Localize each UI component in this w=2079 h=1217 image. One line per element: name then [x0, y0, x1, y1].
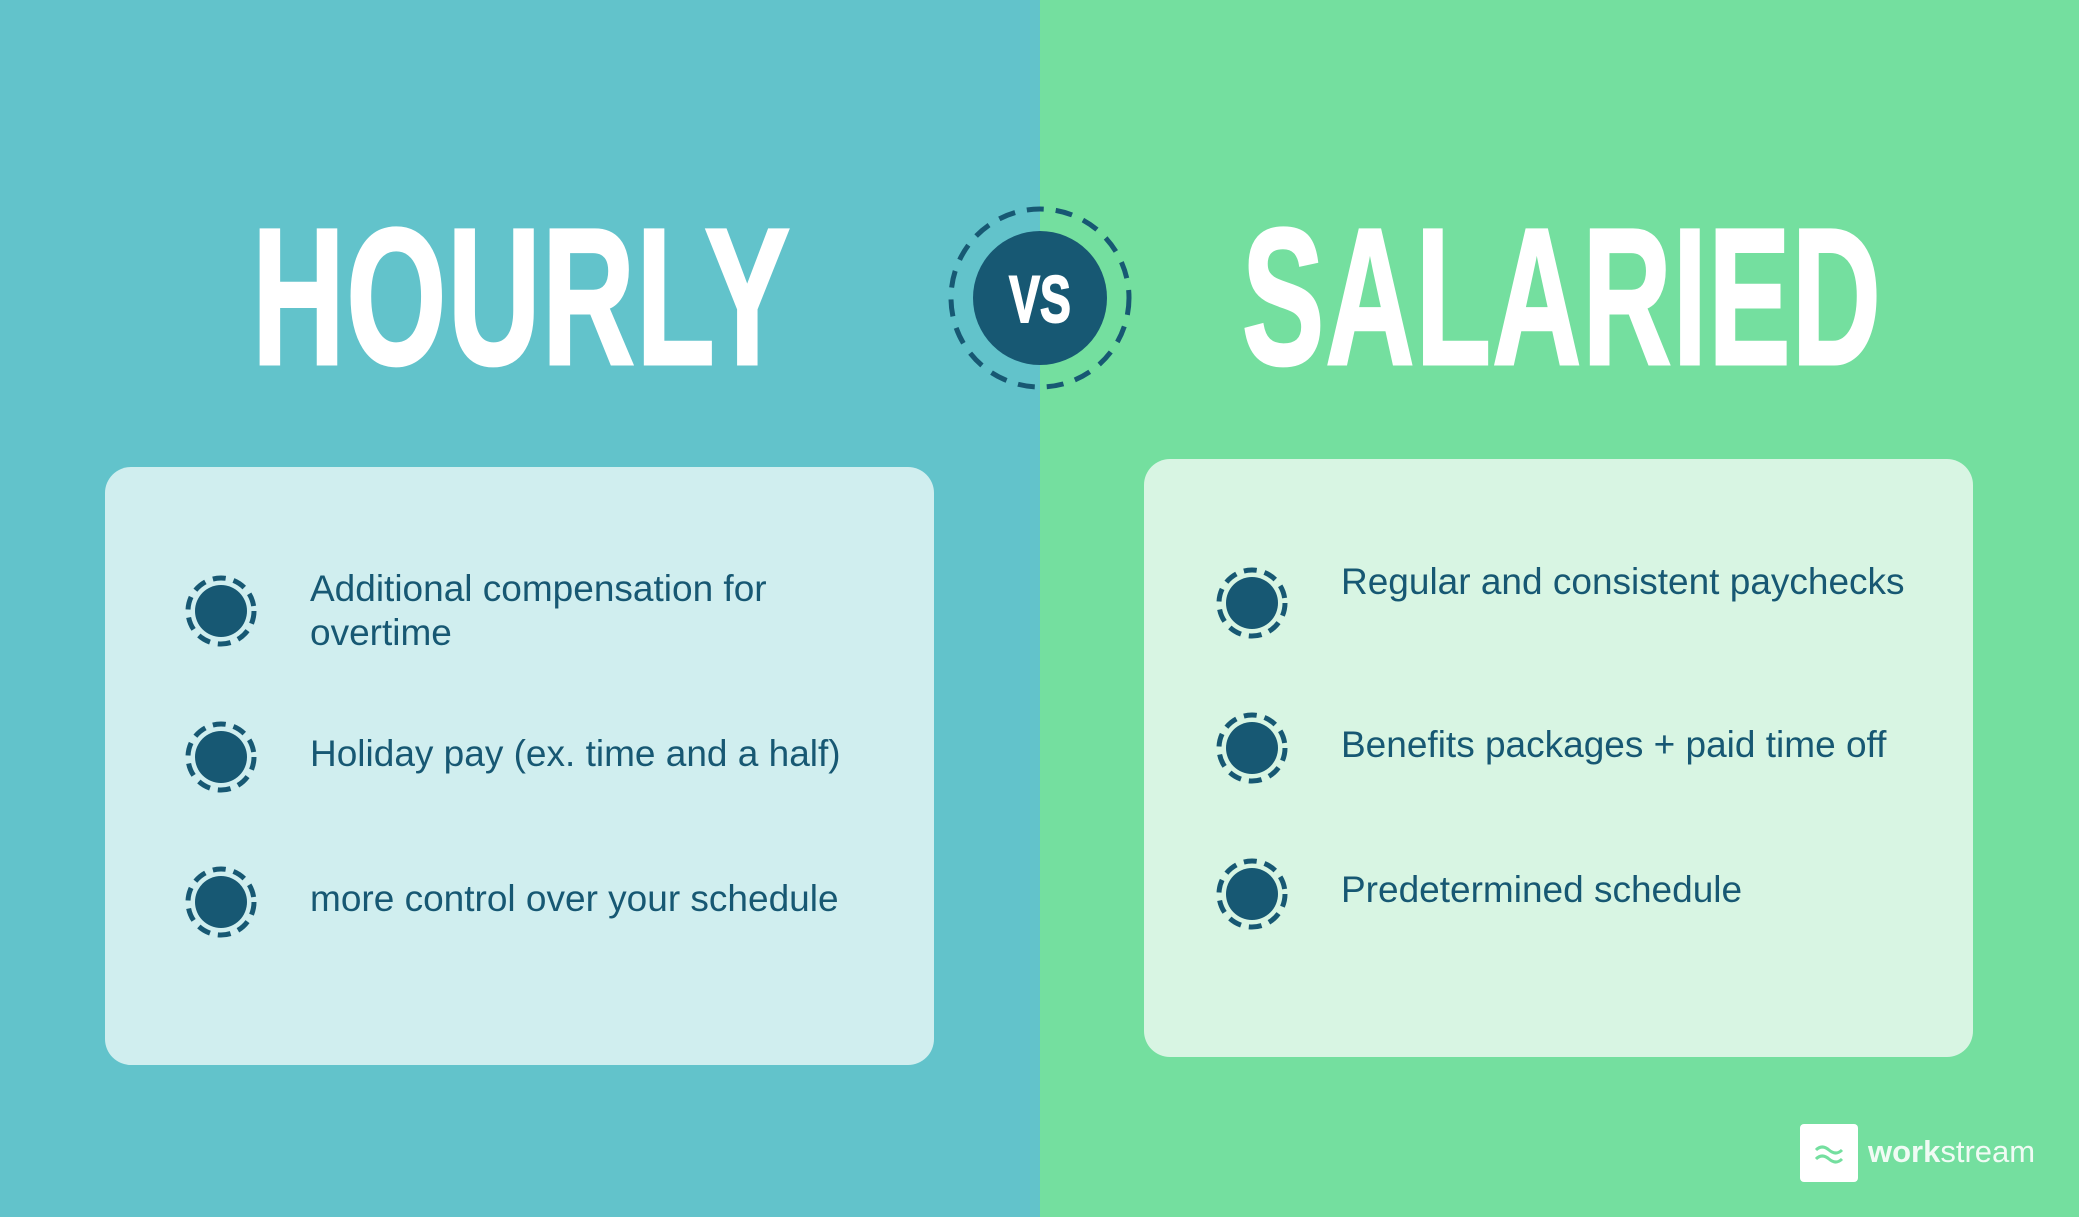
icon: VS badge: VS: [1009, 263, 1071, 337]
text: item 2: Benefits packages + paid time off: [1341, 724, 1886, 765]
title: SALARIED: SALARIED: [1242, 188, 1882, 406]
icon: bullet 1: [1216, 568, 1288, 638]
panel: hourly list box: [105, 467, 934, 1065]
text: item 1: overtime: [310, 612, 452, 653]
panel: salaried list box: [1144, 459, 1973, 1057]
logo: workstream: [1800, 1124, 2035, 1182]
icon: bullet 2: [1216, 712, 1288, 784]
icon: logo mark: [1800, 1124, 1858, 1182]
text: item 2: Holiday pay (ex. time and a half): [310, 733, 841, 774]
panel: hourly background: [0, 0, 1040, 1217]
icon: bullet 3: [186, 866, 256, 938]
text: item 1: [310, 568, 767, 653]
title: HOURLY: HOURLY: [252, 188, 792, 406]
icon: bullet 3: [1216, 858, 1288, 930]
icon: VS badge: [948, 206, 1132, 390]
icon: bullet 1: [186, 576, 256, 646]
icon: bullet 2: [186, 722, 256, 792]
panel: salaried background: [1040, 0, 2079, 1217]
text: item 1: Regular and consistent paychecks: [1341, 561, 1905, 602]
text: item 3: more control over your schedule: [310, 878, 839, 919]
text: item 3: Predetermined schedule: [1341, 869, 1742, 910]
text: item 1: Additional compensation for: [310, 568, 767, 609]
text: logo wordmark: workstream: [1868, 1134, 2035, 1169]
